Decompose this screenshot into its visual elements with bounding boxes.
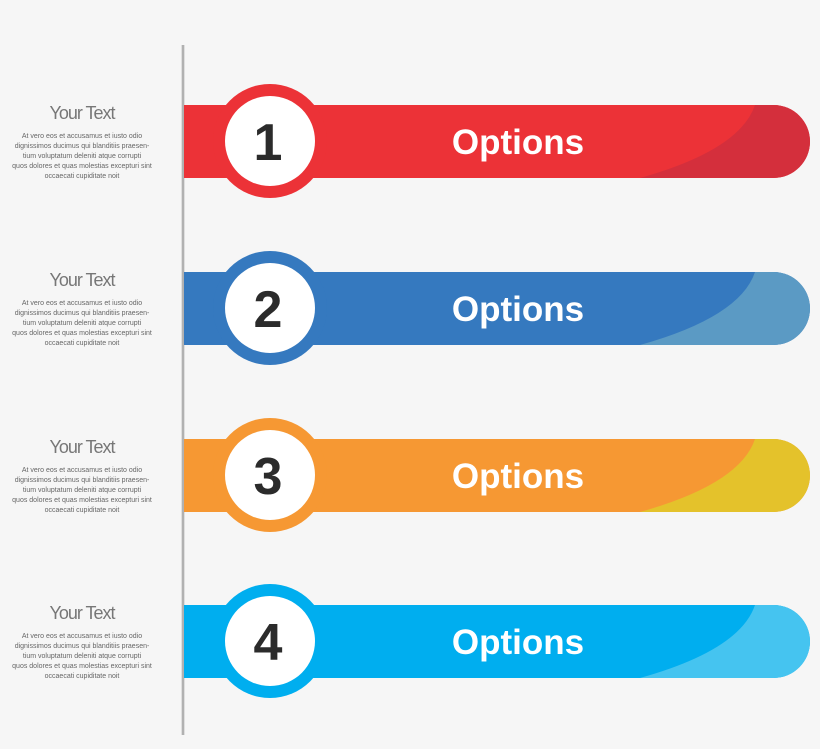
text block 2: tium voluptatum deleniti atque corrupti [23, 320, 142, 327]
text block 1 [12, 103, 152, 180]
text block 3 [12, 437, 152, 514]
text block 1: tium voluptatum deleniti atque corrupti [23, 153, 142, 160]
bar 1 [184, 105, 820, 178]
text block 2: quos dolores et quas molestias excepturi sint [12, 330, 152, 337]
text block 1: Your Text [49, 103, 116, 123]
row 4 [12, 584, 820, 698]
text block 2 [12, 270, 152, 347]
text block 3: tium voluptatum deleniti atque corrupti [23, 487, 142, 494]
badge 4: 4 [254, 614, 283, 672]
row 1 [12, 84, 820, 198]
text block 3: quos dolores et quas molestias excepturi sint [12, 497, 152, 504]
badge 1 [213, 84, 327, 198]
text block 4: occaecati cupiditate noit [45, 673, 119, 680]
text block 1: occaecati cupiditate noit [45, 173, 119, 180]
bar 3 [184, 439, 820, 512]
text block 2: At vero eos et accusamus et iusto odio [22, 300, 142, 307]
label 2: Options [452, 290, 584, 329]
text block 2: dignissimos ducimus qui blanditiis praesen- [15, 310, 150, 317]
text block 4: At vero eos et accusamus et iusto odio [22, 633, 142, 640]
label 1: Options [452, 123, 584, 162]
badge 2: 2 [254, 281, 282, 339]
row 2 [12, 251, 820, 365]
badge 1: 1 [254, 114, 282, 172]
text block 1: dignissimos ducimus qui blanditiis praesen- [15, 143, 150, 150]
text block 4: Your Text [49, 603, 116, 623]
text block 4: dignissimos ducimus qui blanditiis praesen- [15, 643, 150, 650]
text block 4: tium voluptatum deleniti atque corrupti [23, 653, 142, 660]
text block 3: At vero eos et accusamus et iusto odio [22, 467, 142, 474]
text block 3: Your Text [49, 437, 116, 457]
text block 1: At vero eos et accusamus et iusto odio [22, 133, 142, 140]
bar 2 [184, 272, 820, 345]
text block 3: dignissimos ducimus qui blanditiis praesen- [15, 477, 150, 484]
label 3: Options [452, 457, 584, 496]
text block 4 [12, 603, 152, 680]
badge 2 [213, 251, 327, 365]
text block 2: occaecati cupiditate noit [45, 340, 119, 347]
text block 3: occaecati cupiditate noit [45, 507, 119, 514]
badge 3 [213, 418, 327, 532]
bar 4 [184, 605, 820, 678]
badge 3: 3 [254, 448, 282, 506]
text block 2: Your Text [49, 270, 116, 290]
label 4: Options [452, 623, 584, 662]
row 3 [12, 418, 820, 532]
text block 4: quos dolores et quas molestias excepturi sint [12, 663, 152, 670]
badge 4 [213, 584, 327, 698]
text block 1: quos dolores et quas molestias excepturi sint [12, 163, 152, 170]
